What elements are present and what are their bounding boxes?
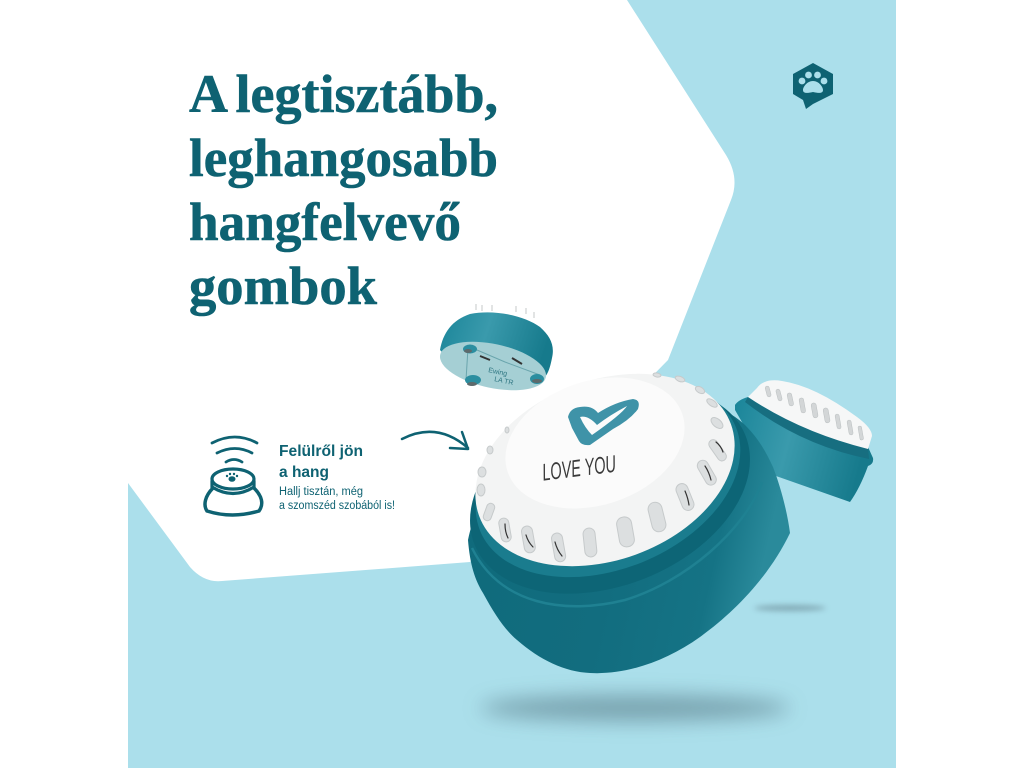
heart logo [568, 399, 639, 445]
feature heading: a hang [279, 464, 329, 481]
title: gombok [189, 256, 377, 316]
ground shadow large [480, 695, 790, 721]
feature heading [279, 443, 363, 481]
background panel [128, 0, 896, 768]
vent slots [477, 372, 728, 563]
feature heading: Felülről jön [279, 443, 363, 460]
title [189, 64, 498, 316]
ground shadow small [754, 605, 826, 611]
feature description: Hallj tisztán, még [279, 486, 363, 498]
title: hangfelvevő [189, 192, 461, 252]
love you text: LOVE YOU [541, 451, 618, 487]
logo icon: paw speech bubble [793, 63, 833, 109]
feature description: a szomszéd szobából is! [279, 500, 395, 512]
small device: underside: LA TR [494, 376, 514, 387]
vent slot shadows [505, 442, 723, 556]
device dome [448, 340, 762, 600]
feature icon: button with sound waves [205, 437, 262, 515]
label disc [488, 356, 702, 530]
arrow [402, 432, 468, 449]
title: A legtisztább, [189, 64, 498, 124]
main device [439, 340, 790, 673]
title: leghangosabb [189, 128, 498, 188]
device rim [439, 344, 781, 633]
white hexagon panel [128, 0, 735, 581]
device body [468, 392, 790, 673]
feature description [279, 486, 395, 512]
small device: underside: Ewing [488, 367, 508, 378]
small device: underside [436, 304, 553, 399]
right device: side button [735, 380, 873, 502]
